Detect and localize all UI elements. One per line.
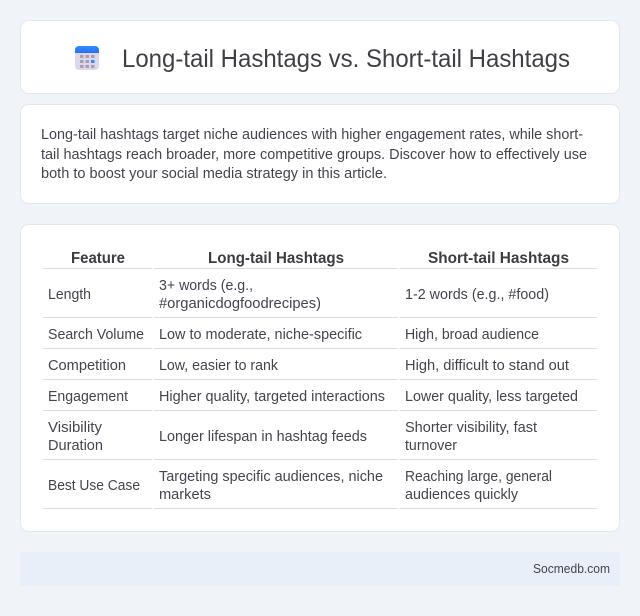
row: visibility duration: turnover	[405, 438, 457, 454]
row: competition	[48, 358, 569, 374]
title: Long-tail Hashtags vs. Short-tail Hashtags	[122, 45, 570, 73]
row: best use case: Reaching large, general	[405, 469, 552, 485]
row: search volume: Low to moderate, niche-specific	[159, 327, 362, 343]
row: search volume: High, broad audience	[405, 327, 539, 343]
intro text: Long-tail hashtags target niche audiences with higher engagement rates, while short-	[41, 127, 583, 143]
table header: Short-tail Hashtags	[428, 250, 569, 267]
row: engagement: Higher quality, targeted interactions	[159, 389, 385, 405]
footer source text: Socmedb.com	[533, 562, 610, 576]
row: best use case: Targeting specific audiences, niche	[159, 469, 383, 485]
table header: Long-tail Hashtags	[208, 250, 344, 267]
footer bar	[20, 552, 620, 586]
table header: Feature	[71, 250, 125, 267]
intro text	[41, 127, 587, 182]
row: competition: Low, easier to rank	[159, 358, 279, 374]
panel: intro text card	[20, 104, 620, 204]
row: length: 3+ words (e.g.,	[159, 278, 253, 294]
row: competition: High, difficult to stand out	[405, 358, 569, 374]
row: length: Length	[48, 287, 91, 303]
row: best use case: markets	[159, 487, 211, 503]
row: search volume	[48, 327, 539, 343]
row: search volume: Search Volume	[48, 327, 144, 343]
row: visibility duration	[48, 420, 537, 454]
row: length: #organicdogfoodrecipes)	[159, 296, 321, 312]
row: visibility duration: Longer lifespan in hashtag feeds	[159, 429, 367, 445]
row: visibility duration: Visibility	[48, 420, 103, 436]
table header	[71, 250, 569, 267]
row: best use case: audiences quickly	[405, 487, 519, 503]
row: competition: Competition	[48, 358, 126, 374]
row: engagement: Engagement	[48, 389, 128, 405]
row: length: 1-2 words (e.g., #food)	[405, 287, 549, 303]
row: visibility duration: Duration	[48, 438, 103, 454]
row: length	[48, 278, 549, 312]
row: best use case: Best Use Case	[48, 478, 140, 494]
row: engagement	[48, 389, 578, 405]
row: best use case	[48, 469, 552, 503]
intro text: both to boost your social media strategy in this article.	[41, 166, 387, 182]
intro text: tail hashtags reach broader, more competitive groups. Discover how to effectively use	[41, 147, 587, 163]
row: visibility duration: Shorter visibility, fast	[405, 420, 537, 436]
panel: title card	[20, 20, 620, 94]
panel: comparison table card	[20, 224, 620, 532]
icon: calendar	[75, 46, 99, 70]
row: engagement: Lower quality, less targeted	[405, 389, 578, 405]
